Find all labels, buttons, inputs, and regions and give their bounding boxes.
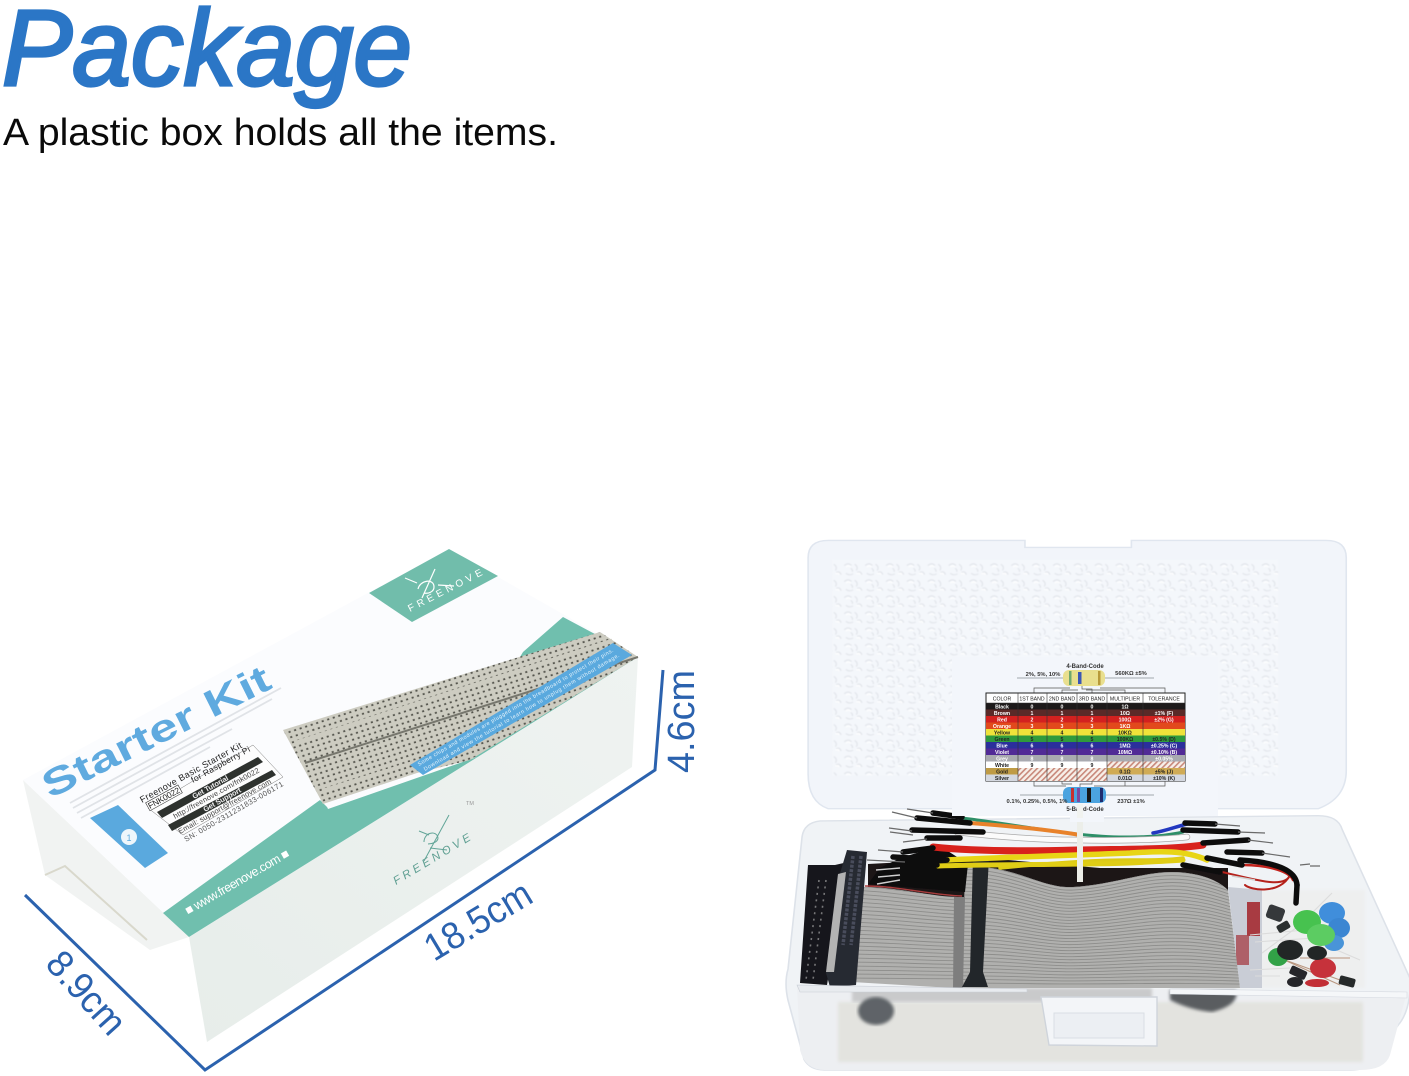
front lip left <box>797 985 1027 992</box>
5-band heading: 5-Band-Code <box>1066 807 1104 813</box>
row: red: 2 <box>1031 717 1034 723</box>
jumper black housings <box>893 813 1297 903</box>
row: silver: Silver <box>995 776 1009 782</box>
row: orange: Orange <box>993 724 1011 730</box>
subtitle: A plastic box holds all the items. <box>3 112 558 154</box>
blue number tag <box>90 805 168 868</box>
box shell and contents <box>786 540 1409 1070</box>
red resistor strip <box>1247 902 1260 936</box>
small grey description <box>70 688 281 818</box>
leader lines top <box>1034 686 1165 693</box>
teal band on top face <box>163 617 638 937</box>
card background <box>952 657 1218 822</box>
row: brown: 1 <box>1031 711 1034 717</box>
row: grey: 8 <box>1031 756 1034 762</box>
row: red: 100Ω <box>1119 717 1131 723</box>
row: red: ±2% (G) <box>1154 717 1174 723</box>
row: black <box>986 703 1185 710</box>
dimension: width: 8.9cm <box>37 943 134 1044</box>
row: silver: 0.01Ω <box>1118 776 1132 782</box>
end flap slot <box>45 866 147 940</box>
row: gold: ±5% (J) <box>1155 769 1173 775</box>
blurred connector blob <box>858 997 894 1025</box>
jumper wires <box>933 818 1293 889</box>
perforated parts board <box>1260 890 1365 988</box>
parts: LEDs and tact switches <box>1250 893 1360 988</box>
product info label: Email: support@freenove.com <box>177 777 273 836</box>
lid bubble wrap <box>832 560 1278 776</box>
black mass at pin bundle <box>868 846 968 892</box>
table header row: 1ST BAND <box>1019 696 1045 702</box>
jumper metal tips <box>867 809 1320 866</box>
row: violet <box>986 748 1185 756</box>
breadboard centre channel <box>305 657 638 763</box>
row: brown <box>986 710 1185 717</box>
ribbon cable large <box>963 868 1240 988</box>
row: grey: 8 <box>1061 756 1064 762</box>
product info label: FNK0022 <box>146 785 182 811</box>
row: violet: 10MΩ <box>1118 750 1132 756</box>
blue notice strip: Some chips and modules are plugged into the breadboard to protect their pins. <box>417 648 615 768</box>
red ribbon edge <box>865 886 962 896</box>
row: brown: ±1% (F) <box>1155 711 1173 717</box>
cable tie over card <box>1077 804 1083 818</box>
breadboard image <box>283 632 638 804</box>
row: green: 5 <box>1061 737 1064 743</box>
row: black: Black <box>995 704 1009 710</box>
row: blue: Blue <box>996 743 1008 749</box>
product info label: for Raspberry Pi <box>189 744 252 785</box>
product info label: Freenove Basic Starter Kit <box>138 740 244 805</box>
product info label: Get Support <box>202 785 243 814</box>
row: green: 5 <box>1091 737 1094 743</box>
row: white: 9 <box>1031 763 1034 769</box>
top logo mark <box>405 569 454 598</box>
white strip under breadboard <box>323 757 477 809</box>
row: yellow <box>986 729 1185 736</box>
black connector B <box>826 850 867 987</box>
red resistor strip lower <box>1236 935 1249 965</box>
table header row: 3RD BAND <box>1079 696 1105 702</box>
row: gold <box>986 768 1185 775</box>
row: gold: 0.1Ω <box>1119 769 1131 775</box>
row: black: 0 <box>1031 704 1034 710</box>
row: white: White <box>995 763 1009 769</box>
row: orange: 1KΩ <box>1120 724 1130 730</box>
row: red <box>986 716 1185 723</box>
clasp inner <box>1054 1013 1144 1038</box>
row: silver <box>986 774 1185 782</box>
blue number tag: 1 <box>126 833 132 843</box>
row: green <box>986 736 1185 743</box>
row: yellow: Yellow <box>994 730 1011 736</box>
row: blue: 6 <box>1091 743 1094 749</box>
5-band example value: 237Ω ±1% <box>1117 799 1145 805</box>
row: red: 2 <box>1061 717 1064 723</box>
row: grey <box>986 755 1185 762</box>
table header row: TOLERANCE <box>1148 696 1180 702</box>
dimension lines <box>25 670 663 1070</box>
4-band tolerance note: 2%, 5%, 10% <box>1026 672 1060 678</box>
5-band resistor <box>1020 787 1154 803</box>
trademark: TM <box>466 801 474 807</box>
row: red: 2 <box>1091 717 1094 723</box>
Starter Kit heading: Starter Kit <box>35 658 278 807</box>
leader lines bottom <box>1034 781 1165 788</box>
row: orange: 3 <box>1091 724 1094 730</box>
table header row: MULTIPLIER <box>1110 696 1140 702</box>
resistor colour table <box>986 693 1185 782</box>
row: violet: ±0.10% (B) <box>1151 750 1177 756</box>
row: brown: 1 <box>1061 711 1064 717</box>
product info label: Get Tutorial <box>191 773 230 801</box>
dimension: length: 18.5cm <box>417 873 540 970</box>
row: grey: ±0.05% <box>1155 756 1173 762</box>
black connector C <box>962 857 989 987</box>
row: silver: ±10% (K) <box>1153 776 1175 782</box>
row: blue: 1MΩ <box>1119 743 1131 749</box>
row: white: 9 <box>1091 763 1094 769</box>
product info label: http://freenove.com/fnk0022 <box>172 766 261 821</box>
breadboard beneath <box>838 1002 1363 1062</box>
blurred connector blob right <box>1170 990 1236 1012</box>
connector B grey slot <box>826 872 846 972</box>
connector B socket holes <box>843 856 861 945</box>
4-band heading: 4-Band-Code <box>1066 664 1104 670</box>
row: black: 1Ω <box>1121 704 1129 710</box>
row: blue: 6 <box>1061 743 1064 749</box>
product photo: open plastic storage box <box>786 540 1409 1070</box>
resistor colour code card <box>952 657 1218 822</box>
row: orange <box>986 722 1185 730</box>
row: green: Green <box>994 737 1010 743</box>
4-band example value: 560KΩ ±5% <box>1115 671 1147 677</box>
row: violet: 7 <box>1061 750 1064 756</box>
box clasp <box>1041 997 1157 1046</box>
website text: ■ www.freenove.com ■ <box>182 846 292 918</box>
row: orange: 3 <box>1031 724 1034 730</box>
lower tray below lip <box>797 985 1407 1070</box>
cable tie <box>1077 813 1083 882</box>
row: green: 100KΩ <box>1117 737 1133 743</box>
row: yellow: 4 <box>1031 730 1034 736</box>
row: brown: Brown <box>994 711 1010 717</box>
row: grey: 8 <box>1091 756 1094 762</box>
box base <box>786 816 1409 1070</box>
row: white <box>986 762 1185 769</box>
row: black: 0 <box>1061 704 1064 710</box>
box front face <box>189 657 638 1042</box>
row: violet: 7 <box>1091 750 1094 756</box>
box end flap face <box>23 780 189 950</box>
row: black: 0 <box>1091 704 1094 710</box>
table column rules <box>986 693 1185 781</box>
ribbon fold shadow <box>953 897 965 988</box>
row: grey: Grey <box>996 756 1008 762</box>
top logo wordmark: FREENOVE <box>406 567 485 615</box>
blue notice strip: Download and view the tutorial to learn how to unplug them without damage. <box>423 653 621 773</box>
row: brown: 1 <box>1091 711 1094 717</box>
front lip right <box>1170 989 1407 998</box>
row: green: ±0.5% (D) <box>1152 737 1176 743</box>
table header row: 2ND BAND <box>1049 696 1075 702</box>
breadboard rails <box>296 640 612 790</box>
box top face <box>23 549 638 937</box>
row: red: Red <box>997 717 1007 723</box>
row: blue: 6 <box>1031 743 1034 749</box>
row: yellow: 4 <box>1091 730 1094 736</box>
row: violet: 7 <box>1031 750 1034 756</box>
row: brown: 10Ω <box>1120 711 1130 717</box>
table header row <box>993 696 1180 702</box>
row: violet: Violet <box>995 750 1009 756</box>
dimension: height: 4.6cm <box>661 670 703 773</box>
row: blue: ±0.25% (C) <box>1151 743 1177 749</box>
logo teal square <box>369 549 498 622</box>
row: yellow: 4 <box>1061 730 1064 736</box>
product info label <box>138 740 285 844</box>
row: white: 9 <box>1061 763 1064 769</box>
row: green: 5 <box>1031 737 1034 743</box>
jumper silver tips at ribbon <box>876 868 1255 884</box>
row: orange: 3 <box>1061 724 1064 730</box>
black connector A <box>800 862 848 985</box>
row: blue <box>986 742 1185 749</box>
lid outer <box>808 540 1346 809</box>
row: yellow: 10KΩ <box>1118 730 1132 736</box>
clear resistor package <box>1228 887 1262 988</box>
table header row: COLOR <box>993 696 1011 702</box>
product info label: SN: 0050-2311231833-006171 <box>182 779 285 844</box>
4-band resistor <box>1017 670 1154 686</box>
product photo: kit cardboard box <box>23 549 638 1042</box>
blurred ribbon under lip <box>852 988 1152 1002</box>
connector A pin holes <box>806 880 826 980</box>
ribbon cable small <box>856 887 957 988</box>
front logo mark <box>419 815 449 861</box>
lid and base shell scaled from photo space <box>786 540 1409 1070</box>
front logo wordmark: FREENOVE <box>391 832 473 888</box>
row: gold: Gold <box>996 769 1008 775</box>
5-band tolerance note: 0.1%, 0.25%, 0.5%, 1% <box>1007 799 1067 805</box>
dark cable mass behind ribbons <box>868 858 1228 900</box>
